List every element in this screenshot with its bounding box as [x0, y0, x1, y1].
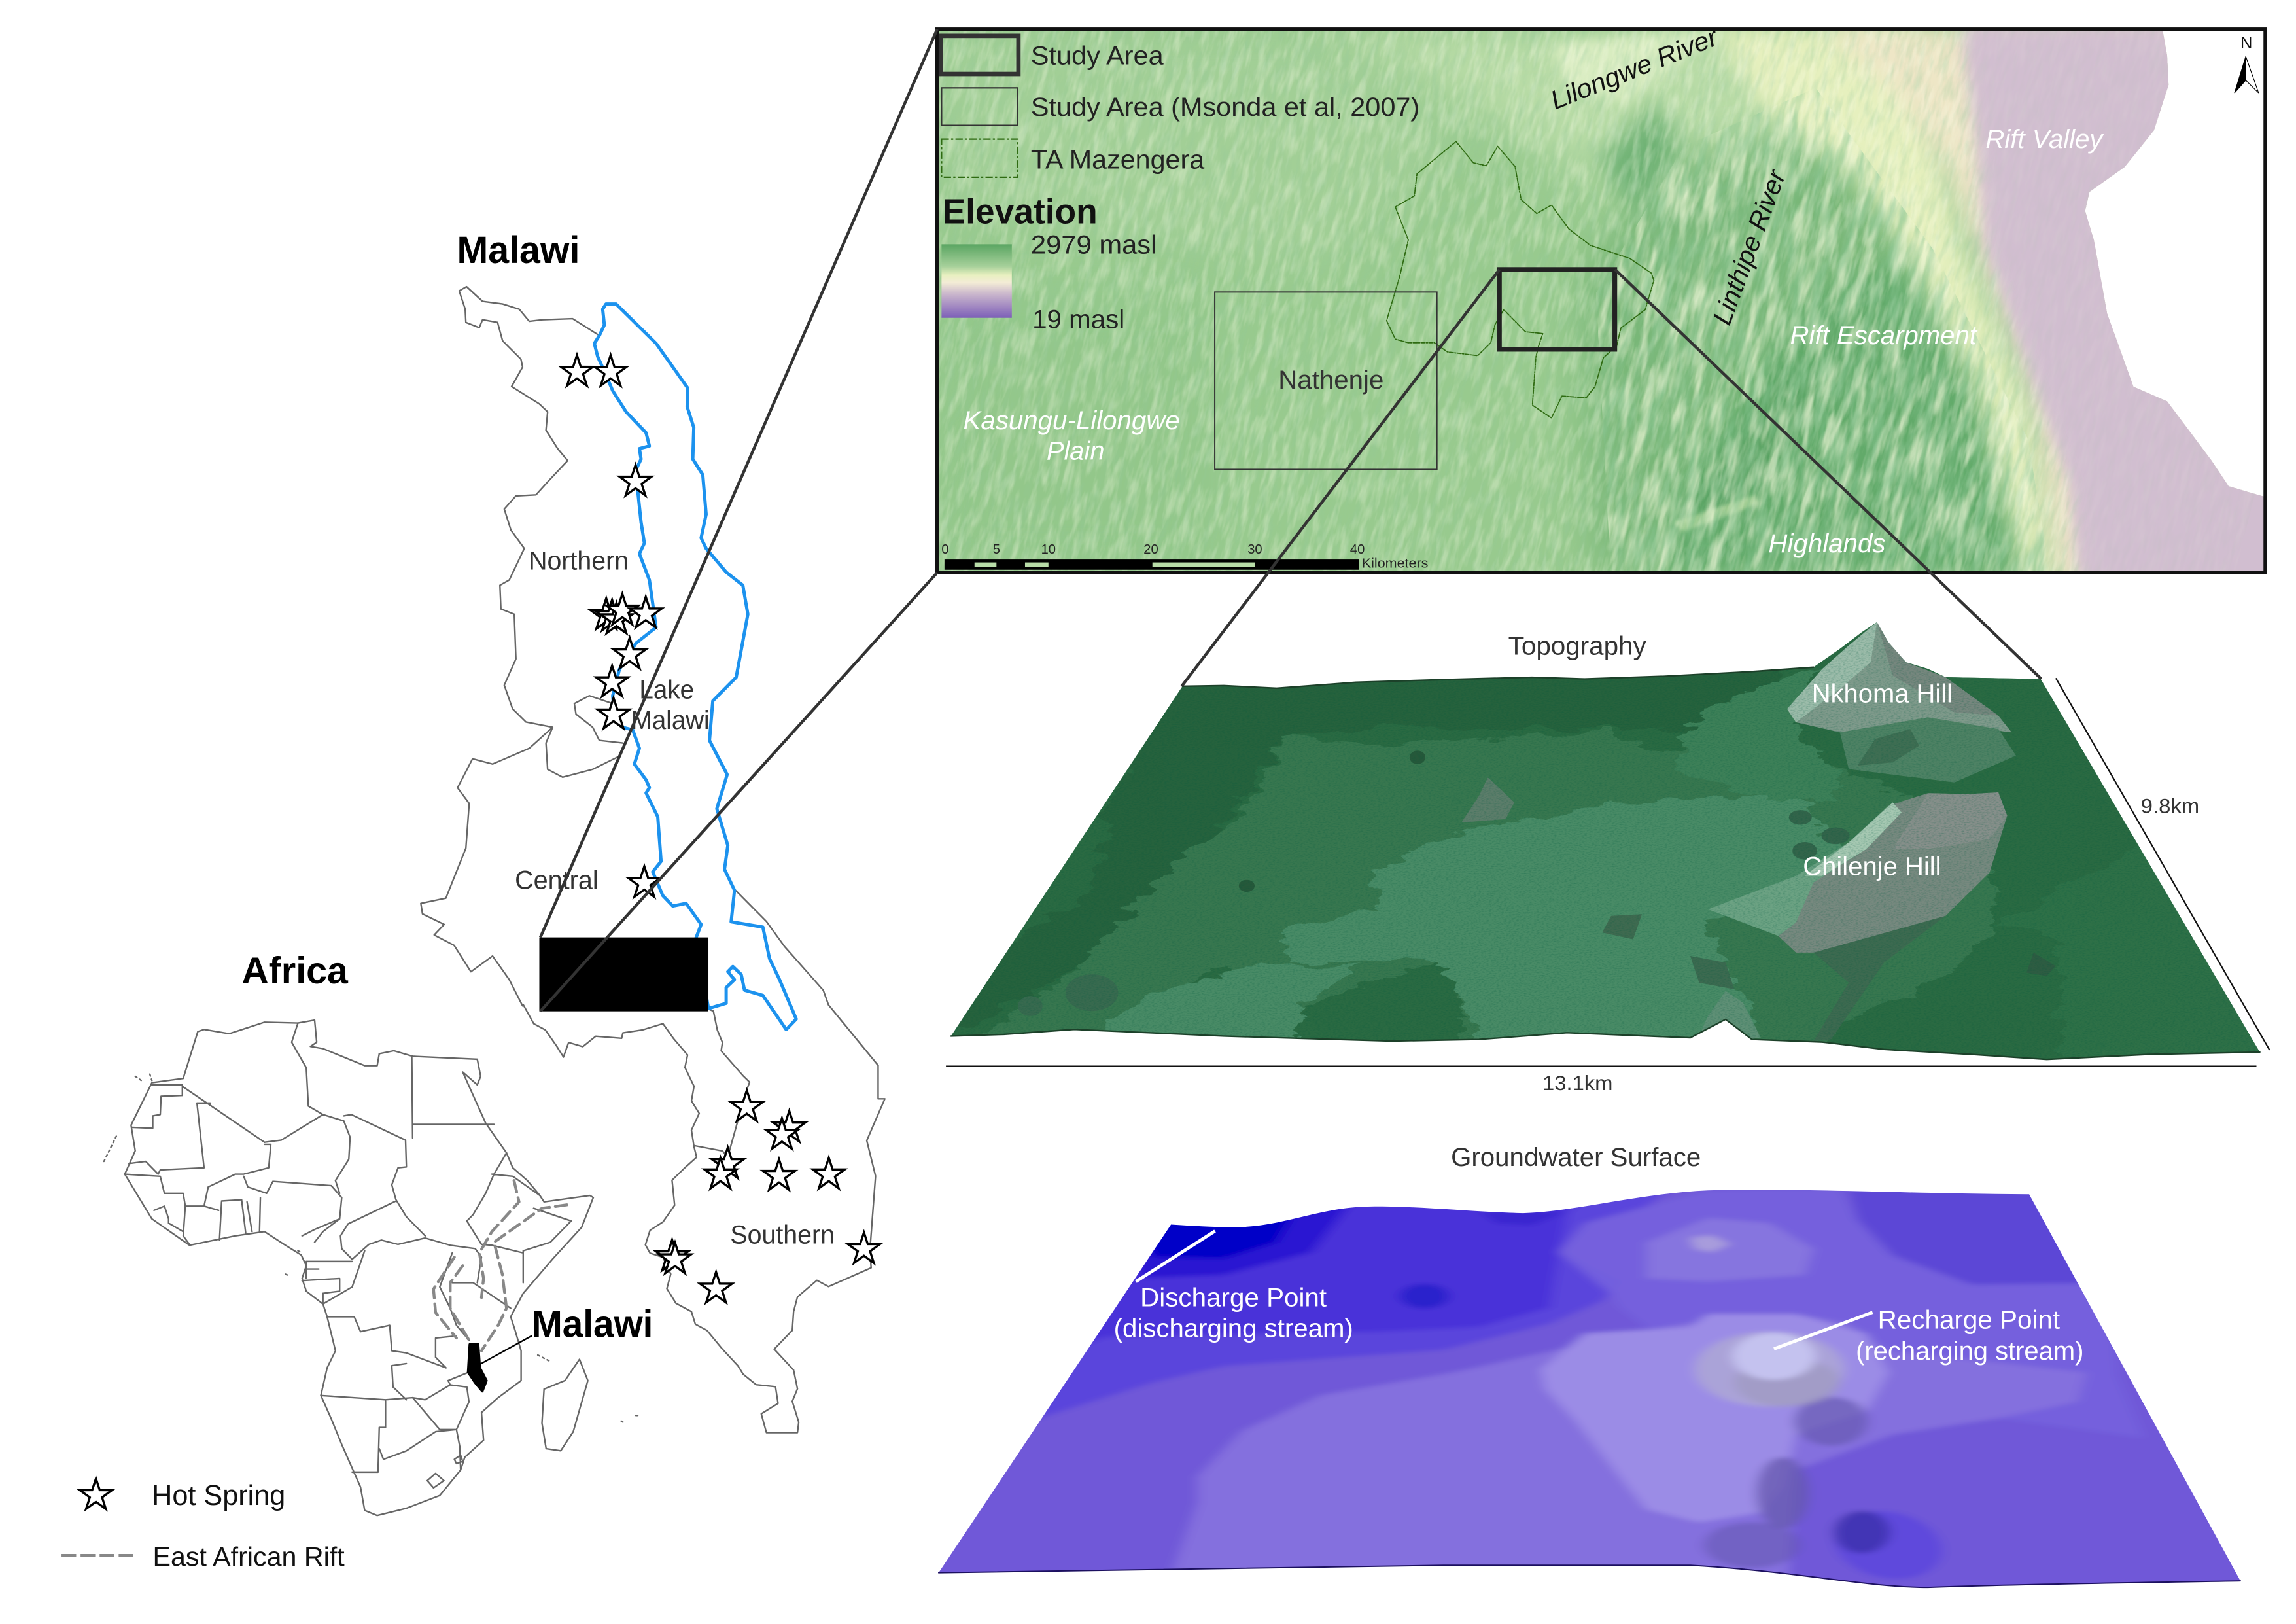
Study area box — [1499, 270, 1615, 349]
elevation colour ramp — [941, 244, 1012, 318]
discharge leader line — [1136, 1231, 1215, 1282]
scale bar: 30 — [1247, 542, 1262, 557]
label: Highlands: Highlands — [1768, 529, 1886, 558]
legend text: study area: Study Area — [1031, 41, 1164, 70]
scale bar: 10 — [1041, 542, 1056, 557]
label: Southern: Southern — [730, 1220, 835, 1249]
ramp max label: 2979 masl — [1031, 230, 1157, 259]
swatch: Msonda study area — [941, 88, 1018, 126]
study area black block — [539, 938, 708, 1012]
elevation heading: Elevation — [942, 192, 1098, 231]
scale bar — [941, 542, 1428, 571]
north arrow: N — [2240, 34, 2252, 52]
label: Kasungu-Lilongwe Plain: Kasungu-Lilongwe — [964, 406, 1180, 435]
Africa coastline — [125, 1020, 593, 1515]
scale bar: 5 — [993, 542, 1000, 557]
legend text: TA Mazengera: TA Mazengera — [1031, 145, 1205, 174]
text: East African Rift: East African Rift — [153, 1542, 345, 1572]
scale bar: 0 — [941, 542, 949, 557]
north arrow — [2235, 34, 2259, 93]
TA Mazengera boundary — [1387, 141, 1654, 418]
map frame — [937, 29, 2265, 573]
panel: 3D topography — [946, 622, 2270, 1090]
heading: Groundwater Surface: Groundwater Surface — [1451, 1142, 1701, 1172]
hillshade terrain raster — [939, 31, 2263, 571]
label: Lilongwe River: Lilongwe River — [1546, 22, 1723, 115]
Malawi border south — [523, 890, 885, 1433]
terrain dark edge: top — [1183, 667, 1813, 688]
hot spring star — [80, 1479, 112, 1509]
panel: groundwater surface — [938, 1147, 2241, 1589]
swatch: study area — [941, 36, 1018, 74]
label: Northern: Northern — [529, 546, 629, 575]
swatch: TA Mazengera — [941, 139, 1018, 177]
hot spring stars — [561, 355, 880, 1303]
scale bar: 20 — [1143, 542, 1158, 557]
map: Malawi — [421, 229, 885, 1433]
Malawi leader line — [478, 1336, 532, 1366]
dimension label: 9.8km: 9.8km — [2141, 794, 2199, 817]
Madagascar — [542, 1359, 588, 1451]
scale bar: 40 — [1350, 542, 1365, 557]
label: Lake Malawi: Lake — [639, 675, 694, 704]
label: discharge point: (discharging stream) — [1114, 1314, 1353, 1343]
label: Rift Escarpment: Rift Escarpment — [1790, 321, 1978, 350]
ramp min label: 19 masl — [1032, 304, 1124, 334]
label: Central: Central — [515, 866, 599, 895]
dimension line: depth — [2056, 678, 2270, 1050]
label: recharge point: (recharging stream) — [1856, 1336, 2083, 1366]
legend — [941, 36, 1419, 334]
legend text: Msonda study area: Study Area (Msonda et al, 2007) — [1031, 92, 1419, 122]
connector lines: map to elevation panel — [540, 29, 2041, 1012]
label: Nkhoma Hill: Nkhoma Hill — [1812, 679, 1953, 708]
Lake Malawi outline — [595, 304, 796, 1030]
heading: Africa: Africa — [241, 950, 349, 992]
Malawi highlighted in black — [468, 1345, 487, 1391]
label: Kasungu-Lilongwe Plain: Plain — [1047, 436, 1105, 465]
label: Nathenje: Nathenje — [1278, 365, 1383, 395]
terrain dark edge: bottom — [951, 1019, 2260, 1059]
text: Hot Spring: Hot Spring — [152, 1480, 285, 1511]
label: Rift Valley: Rift Valley — [1985, 124, 2104, 154]
surface dark edge — [939, 1565, 2240, 1587]
scale bar: Kilometers — [1362, 556, 1428, 571]
label: Lake Malawi: Malawi — [631, 705, 710, 735]
terrain surface — [951, 622, 2259, 1059]
Nathenje study box — [1215, 292, 1437, 469]
heading: Malawi: Malawi — [457, 229, 580, 272]
heading: Topography: Topography — [1508, 631, 1647, 661]
map: Africa — [104, 950, 653, 1515]
label: Chilenje Hill: Chilenje Hill — [1803, 851, 1941, 881]
label: Malawi: Malawi — [532, 1303, 653, 1346]
legend: map symbols — [61, 1479, 345, 1572]
country borders — [125, 1023, 571, 1488]
recharge leader line — [1774, 1313, 1873, 1349]
label: Linthipe River: Linthipe River — [1707, 165, 1792, 328]
islands — [104, 1074, 638, 1422]
dimension label: 13.1km: 13.1km — [1542, 1072, 1612, 1095]
label: recharge point: Recharge Point — [1878, 1305, 2060, 1334]
rift dashed sample — [61, 1555, 135, 1556]
surface contour bands — [939, 1190, 2240, 1587]
Malawi internal southern border — [694, 1009, 750, 1157]
label: discharge point: Discharge Point — [1140, 1283, 1327, 1313]
dimension line: width — [946, 1066, 2257, 1067]
panel: elevation map — [709, 0, 2296, 996]
Malawi border north and central — [421, 287, 623, 1006]
East African Rift dashes — [434, 1180, 567, 1350]
